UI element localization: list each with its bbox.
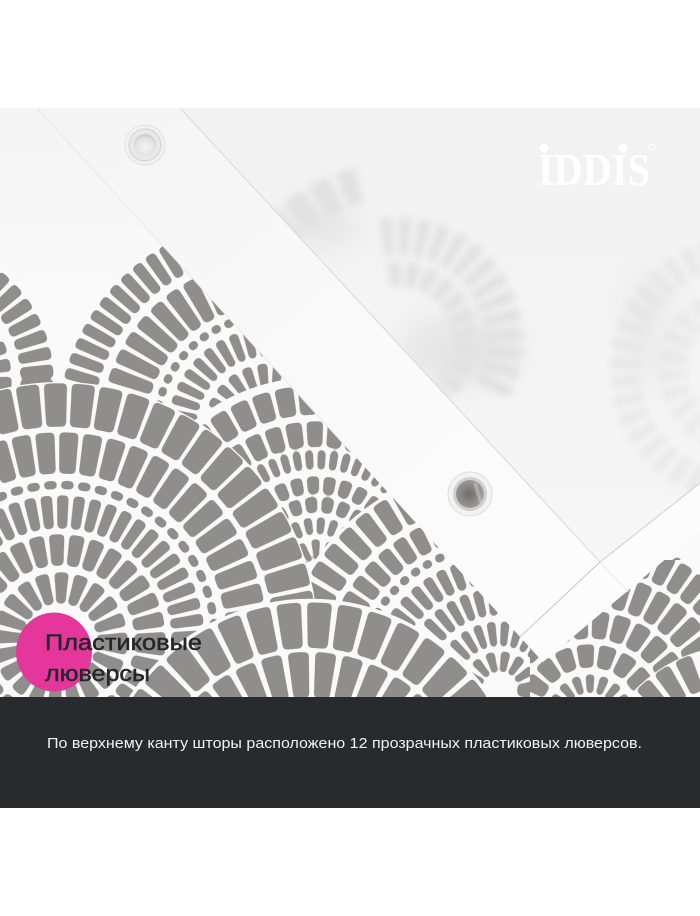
fan: bottom right wedge	[530, 560, 700, 697]
fan: bottom centre	[129, 598, 486, 697]
ghost pattern showing through the fabric	[277, 185, 700, 490]
logo: IDDIS: IDDIS	[538, 145, 650, 195]
fan: far right corner	[631, 651, 700, 697]
fan: top left	[0, 272, 54, 390]
top white margin	[0, 0, 700, 108]
icon: top grommet	[125, 125, 165, 165]
panel: dark caption band	[0, 697, 700, 808]
fan: upper centre	[64, 246, 374, 477]
soft shadow behind ghost pattern	[305, 216, 488, 381]
panel: curtain back side seen through the fold	[180, 108, 700, 568]
accent: pink blob	[16, 612, 92, 692]
fan: centre wedge	[194, 380, 489, 603]
icon: lower grommet	[448, 472, 492, 516]
heading: Пластиковые	[45, 630, 202, 655]
caption text: По верхнему канту шторы расположено 12 прозрачных пластиковых люверсов.	[47, 735, 642, 752]
heading: люверсы	[45, 661, 150, 686]
fan: lower centre right	[311, 494, 681, 697]
bottom white margin	[0, 808, 700, 916]
photo: curtain front fabric	[0, 108, 700, 697]
pattern: grey scallop fans printed on the curtain	[0, 246, 700, 697]
fan: large left	[0, 382, 315, 697]
hem stitch and fold lines	[37, 108, 700, 637]
heading	[45, 630, 202, 686]
curtain hem band	[37, 108, 700, 662]
